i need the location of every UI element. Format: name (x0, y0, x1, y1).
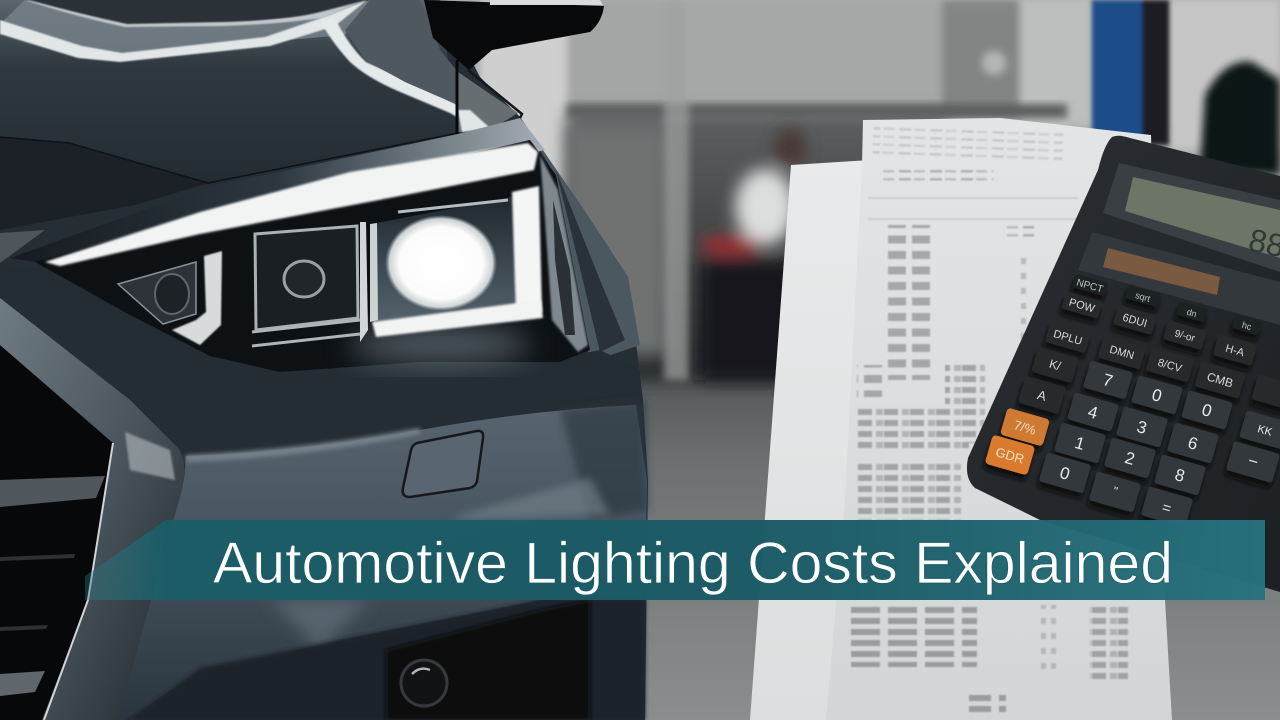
keys: = (1160, 499, 1173, 518)
bumper right streaks (560, 400, 648, 520)
lower hood panel (0, 137, 208, 230)
main lamp module (370, 186, 543, 337)
keys: 1 (1073, 433, 1087, 454)
keys: − (1246, 451, 1261, 472)
keys: 0 (1058, 463, 1072, 484)
grille slats (0, 476, 105, 507)
sensor cap (403, 431, 483, 497)
keys: 6 (1186, 433, 1200, 454)
keys: DMN (1108, 344, 1135, 362)
brow above lamp (10, 118, 545, 264)
keys: A (1036, 387, 1048, 404)
fog lamp (401, 660, 447, 706)
bumper surface (110, 405, 647, 720)
hood reflections (0, 0, 495, 130)
keys: sqrt (1134, 290, 1152, 304)
title: Automotive Lighting Costs Explained (213, 531, 1173, 596)
lower dark panel (130, 600, 645, 720)
display bezel (1103, 163, 1280, 272)
keys: POW (1067, 297, 1097, 316)
keys: dn (1186, 307, 1198, 319)
pillar line (456, 60, 458, 134)
bumper crease highlight (186, 428, 420, 462)
dark equipment (1200, 62, 1280, 175)
lower body highlight (270, 600, 370, 650)
hood (0, 0, 458, 230)
keys: 9/-or (1173, 328, 1197, 345)
keys: NPCT (1075, 277, 1104, 295)
glowing projector lens (385, 215, 497, 311)
mirror (424, 0, 604, 70)
grille frame (0, 298, 184, 720)
solar strip (1103, 248, 1220, 295)
keys: 4 (1086, 402, 1100, 423)
keys: 8/CV (1156, 357, 1184, 375)
under-lamp dark band (0, 265, 640, 455)
keys: KK (1256, 423, 1274, 439)
keys: K/ (1048, 357, 1063, 373)
pillar glass (458, 72, 518, 132)
lower bezel strip (1078, 232, 1280, 325)
keys: 0 (1200, 400, 1214, 421)
middle lamp module (252, 222, 368, 346)
orange keys: 7/% (1012, 417, 1038, 438)
keys: 0 (1150, 385, 1164, 406)
car body (0, 0, 648, 720)
background pillar (664, 0, 689, 380)
back wall (567, 112, 947, 382)
lamp glow halo (350, 325, 530, 365)
small lamp module (118, 251, 222, 345)
keys: DPLU (1052, 328, 1084, 348)
keys: CMB (1205, 370, 1235, 390)
right paper sheet (826, 118, 1172, 720)
keys (1018, 274, 1280, 528)
grille (0, 298, 184, 720)
title banner (85, 520, 1265, 600)
paper text rows (843, 127, 1128, 716)
keys: hc (1241, 320, 1253, 332)
keys: 6DUI (1121, 312, 1148, 330)
hood seam (0, 133, 458, 183)
keys: H-A (1224, 343, 1246, 360)
left paper sheet (750, 160, 1000, 720)
keys: 8 (1173, 465, 1187, 486)
keys: " (1111, 484, 1119, 498)
keys: 2 (1123, 448, 1137, 469)
blurred background car (700, 128, 806, 380)
calculator (967, 136, 1280, 592)
left side marker (0, 230, 45, 263)
banner left fade (85, 520, 166, 600)
DRL strip (45, 143, 538, 266)
blue lift column (1092, 0, 1169, 145)
lamp housing (35, 140, 590, 372)
calculator display (1125, 177, 1280, 258)
keys: 3 (1135, 417, 1149, 438)
lamp side fins (540, 155, 588, 352)
keys: 7 (1101, 370, 1115, 391)
orange keys: GDR (994, 444, 1026, 467)
side panel by lamp (520, 117, 640, 362)
orange keys (985, 407, 1050, 475)
